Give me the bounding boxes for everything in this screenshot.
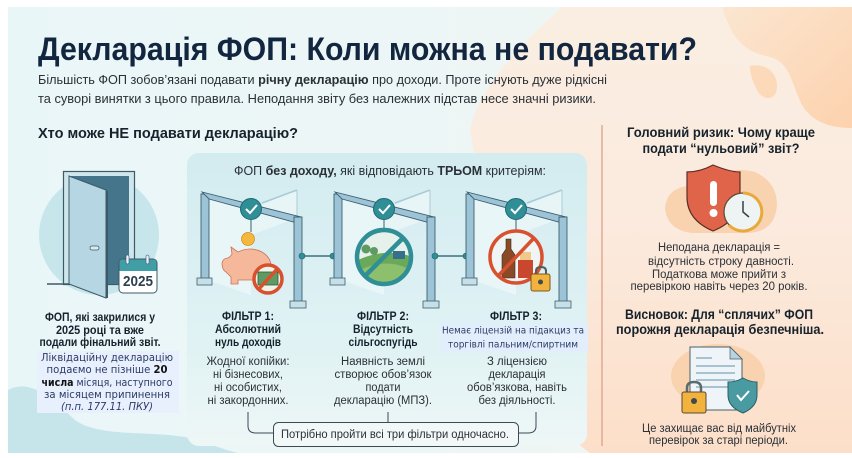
icon: check 3 bbox=[506, 198, 526, 220]
icon: farm field bbox=[357, 230, 411, 284]
icon: door with calendar: 2025 bbox=[123, 274, 153, 290]
filter 3 text bbox=[440, 311, 588, 407]
connector 2 bbox=[432, 253, 469, 259]
gate 3 bbox=[462, 190, 571, 308]
filter 2 text: декларацію (МПЗ). bbox=[334, 395, 432, 407]
risk text: перевіркою навіть через 20 років. bbox=[630, 281, 808, 293]
conclusion text bbox=[642, 423, 796, 447]
section heading: Хто може НЕ подавати декларацію? bbox=[38, 125, 298, 142]
filter 2 text: створює обов’язок bbox=[334, 369, 432, 381]
filter 2 text: сільгоспугідь bbox=[348, 337, 418, 349]
liquidation note: подаємо не пізніше 20 bbox=[46, 364, 168, 376]
filter 1 text: ні закордонних. bbox=[208, 395, 288, 407]
risk text: відсутність строку давності. bbox=[648, 256, 794, 268]
bracket callout: Потрібно пройти всі три фільтри одночасно. bbox=[281, 429, 509, 441]
filter 2 text: подати bbox=[366, 382, 400, 394]
filter 1 text: Жодної копійки: bbox=[206, 356, 290, 368]
filter 1 text: ні особистих, bbox=[214, 382, 282, 394]
closed FOP label: 2025 році та вже bbox=[56, 323, 144, 337]
conclusion heading: порожня декларація безпечніша. bbox=[616, 322, 824, 337]
conclusion heading bbox=[616, 307, 824, 337]
conclusion heading: Висновок: Для “сплячих” ФОП bbox=[625, 307, 813, 322]
filter 2 text bbox=[334, 311, 432, 407]
panel: main risk bbox=[616, 125, 824, 447]
gate 2 bbox=[330, 190, 439, 308]
filter 1 text: нуль доходів bbox=[215, 337, 281, 349]
conclusion text: перевірок за старі періоди. bbox=[649, 435, 788, 447]
filter 2 text: Відсутність bbox=[353, 324, 413, 336]
liquidation note: числа місяця, наступного bbox=[42, 377, 172, 389]
liquidation note: (п.п. 177.11. ПКУ) bbox=[61, 401, 153, 413]
filter 1 text: ні бізнесових, bbox=[213, 369, 283, 381]
panel heading: ФОП без доходу, які відповідають ТРЬОМ критеріям: bbox=[234, 163, 546, 178]
icon: document lock shield bbox=[671, 344, 765, 413]
icon: check 1 bbox=[240, 198, 262, 220]
closed FOP label: ФОП, які закрилися у bbox=[45, 310, 155, 324]
connector 1 bbox=[299, 253, 336, 259]
filter 3 text: Немає ліцензій на підакциз та bbox=[442, 326, 584, 336]
risk heading bbox=[627, 125, 815, 156]
filter 3 text: ФІЛЬТР 3: bbox=[490, 311, 542, 323]
closed FOP label: подали фінальний звіт. bbox=[40, 335, 160, 349]
icon: prohibited alcohol and tobacco bbox=[490, 231, 550, 291]
liquidation note: Ліквідаційну декларацію bbox=[41, 352, 173, 364]
icon: piggy bank bbox=[222, 232, 282, 293]
icon: door with calendar bbox=[39, 172, 159, 298]
title: Декларація ФОП: Коли можна не подавати? bbox=[38, 31, 697, 67]
filter 2 text: ФІЛЬТР 2: bbox=[357, 311, 409, 323]
panel: three filters bbox=[187, 153, 588, 446]
icon: shield and clock bbox=[665, 165, 777, 233]
risk heading: подати “нульовий” звіт? bbox=[642, 141, 800, 156]
filter 1 text: ФІЛЬТР 1: bbox=[222, 311, 274, 323]
bracket callout bbox=[248, 412, 536, 446]
risk text: Неподана декларація = bbox=[658, 242, 780, 254]
gate 1 bbox=[197, 190, 306, 308]
filter 1 text: Абсолютний bbox=[215, 324, 281, 336]
intro text: та суворі винятки з цього правила. Неподання звіту без належних підстав несе значні ризики. bbox=[38, 92, 596, 106]
closed FOP label bbox=[40, 310, 160, 349]
liquidation note: за місяцем припинення bbox=[44, 389, 170, 401]
risk text: Податкова може прийти з bbox=[652, 269, 786, 281]
filter 3 text: декларація bbox=[488, 369, 546, 381]
filter 3 text: З ліцензією bbox=[487, 356, 547, 368]
liquidation note bbox=[37, 351, 179, 413]
icon: check 2 bbox=[374, 198, 394, 220]
panel: closed FOP bbox=[37, 172, 179, 413]
filter 3 text: торгівлі пальним/спиртним bbox=[448, 340, 578, 350]
intro text bbox=[38, 73, 607, 106]
filter 3 text: без діяльності. bbox=[478, 395, 556, 407]
filter 3 text: обов’язкова, навіть bbox=[467, 382, 567, 394]
risk heading: Головний ризик: Чому краще bbox=[627, 125, 815, 140]
divider bbox=[601, 125, 603, 446]
filter 1 text bbox=[206, 311, 290, 407]
risk text bbox=[630, 242, 808, 293]
conclusion text: Це захищає вас від майбутніх bbox=[642, 423, 796, 435]
filter 2 text: Наявність землі bbox=[341, 356, 425, 368]
intro text: Більшість ФОП зобов’язані подавати річну декларацію про доходи. Проте існують дуже рідкісні bbox=[38, 73, 607, 87]
